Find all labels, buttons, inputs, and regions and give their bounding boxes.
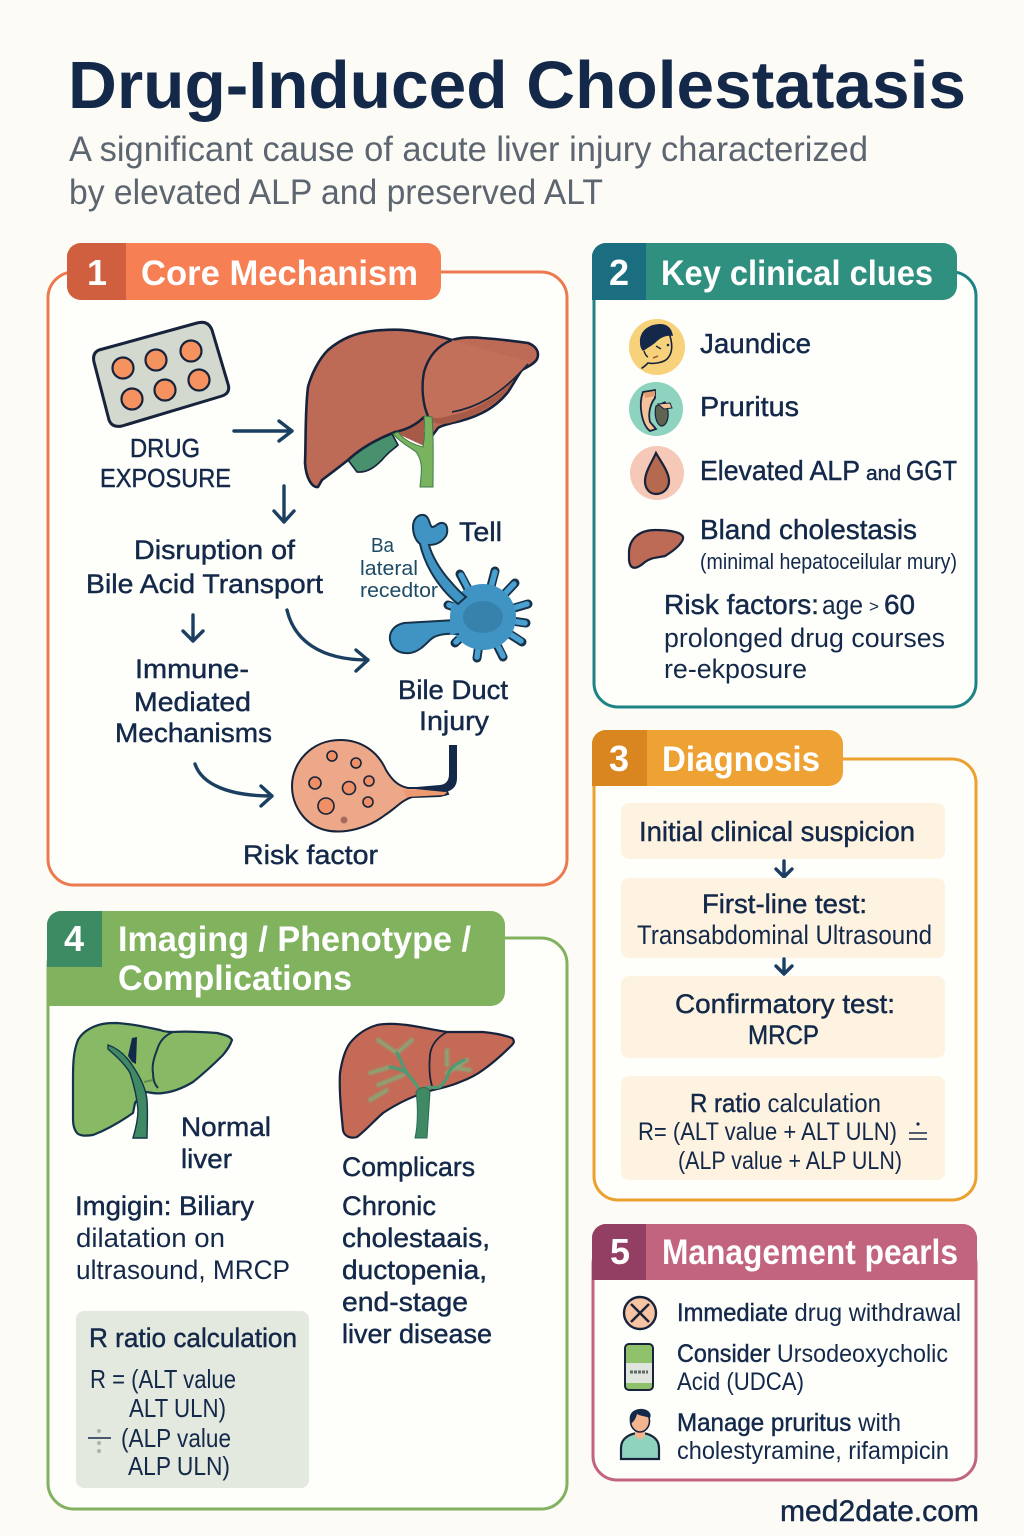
box: initial suspicion: Initial clinical suspicion — [639, 816, 915, 847]
subtitle: A significant cause of acute liver injury characterized — [69, 130, 868, 169]
text: elevated alp and ggt — [700, 455, 957, 486]
text: consider udca: Acid (UDCA) — [677, 1368, 804, 1396]
text: consider udca: Consider Ursodeoxycholic — [677, 1340, 948, 1368]
icon: liver — [305, 330, 538, 487]
panel: management pearls — [592, 1224, 977, 1480]
text: drug exposure — [100, 433, 231, 493]
text: complications list — [342, 1191, 492, 1349]
box: r ratio calculation: ALT ULN) — [129, 1393, 226, 1423]
text: disruption: Disruption of — [134, 535, 296, 565]
heading: management pearls — [592, 1224, 977, 1280]
icon: normal liver — [73, 1023, 232, 1138]
text: immune mechanisms: Mechanisms — [115, 718, 272, 748]
text: pruritus: Pruritus — [700, 391, 799, 422]
text: drug exposure: DRUG — [130, 433, 200, 463]
arrow: liver to disruption — [274, 486, 294, 522]
text: normal liver: liver — [181, 1144, 232, 1174]
heading: core mechanism: 1 — [87, 252, 107, 293]
heading: core mechanism: Core Mechanism — [141, 254, 418, 293]
text: basolateral receptor — [360, 535, 438, 602]
footer: website: med2date.com — [780, 1495, 979, 1528]
text: risk factors: age — [822, 590, 863, 620]
title: Drug-Induced Cholestatasis — [68, 48, 966, 123]
heading: management pearls: 5 — [610, 1231, 630, 1272]
text: immune mechanisms — [115, 654, 272, 748]
text: risk factors: Risk factors: — [664, 589, 819, 620]
text: elevated alp and ggt: and — [866, 463, 901, 485]
text: complications list: cholestaais, — [342, 1223, 490, 1253]
text: basolateral receptor: Ba — [371, 535, 395, 557]
heading: imaging phenotype complications: Imaging / Phenotype / — [118, 920, 471, 959]
icon: pruritus — [629, 382, 683, 436]
text: risk factors: > — [869, 597, 879, 616]
box: r ratio calculation — [76, 1311, 309, 1488]
text: bile duct injury: Bile Duct — [398, 675, 509, 705]
subtitle: by elevated ALP and preserved ALT — [69, 173, 603, 212]
text: bland cholestasis — [700, 514, 957, 574]
box: first-line test — [621, 878, 945, 958]
icon: medicine bottle — [625, 1344, 653, 1390]
arrow: drug to liver — [234, 421, 292, 441]
heading: management pearls: Management pearls — [662, 1233, 958, 1272]
icon: person — [621, 1409, 659, 1459]
text: risk factors: re-ekposure — [664, 654, 807, 684]
text: immune mechanisms: Immune- — [135, 654, 249, 684]
heading: diagnosis: 3 — [609, 738, 629, 779]
box: r ratio: R ratio calculation — [690, 1088, 881, 1118]
text: jaundice: Jaundice — [700, 328, 811, 359]
box: r ratio: R= (ALT value + ALT ULN) — [638, 1118, 897, 1146]
text: complications label: Complicars — [342, 1152, 475, 1182]
arrow: to confirmatory test — [776, 959, 792, 974]
text: disruption — [86, 535, 324, 599]
text: imaging findings: Imgigin: Biliary — [75, 1191, 254, 1221]
panel: diagnosis — [592, 730, 976, 1200]
text: manage pruritus — [677, 1409, 949, 1465]
arrow: disruption to immune — [183, 615, 203, 641]
arrow: immune to risk — [195, 764, 272, 806]
text: elevated alp and ggt: Elevated ALP — [700, 455, 860, 486]
text: risk factors — [664, 589, 945, 684]
arrow: to first-line test — [776, 861, 792, 877]
text: basolateral receptor: recedtor — [360, 580, 438, 602]
text: consider udca — [677, 1340, 948, 1396]
box: initial suspicion — [621, 803, 945, 859]
text: complications list: ductopenia, — [342, 1255, 487, 1285]
heading: imaging phenotype complications — [47, 911, 505, 1006]
text: imaging findings: dilatation on — [76, 1223, 225, 1253]
text: disruption: Bile Acid Transport — [86, 569, 324, 599]
box: first-line test: Transabdominal Ultrasound — [637, 920, 932, 950]
text: normal liver — [181, 1112, 271, 1174]
icon: blister pack — [94, 322, 229, 426]
icon: damaged hepatocyte — [292, 740, 457, 832]
icon: jaundice face — [629, 319, 685, 375]
arrow: disruption to bile duct — [287, 610, 368, 671]
box: r ratio calculation: R = (ALT value — [90, 1364, 236, 1394]
text: bile duct injury: Injury — [419, 706, 490, 736]
icon: drop — [630, 446, 684, 500]
text: imaging findings — [75, 1191, 290, 1285]
box: r ratio — [621, 1076, 945, 1180]
text: complications list: Chronic — [342, 1191, 436, 1221]
box: confirmatory test: MRCP — [748, 1020, 819, 1050]
text: imaging findings: ultrasound, MRCP — [76, 1255, 290, 1285]
heading: key clinical clues: Key clinical clues — [661, 254, 933, 293]
text: complications list: end-stage — [342, 1287, 468, 1317]
text: basolateral receptor: lateral — [360, 558, 418, 580]
text: risk factors: prolonged drug courses — [664, 623, 945, 653]
text: drug exposure: EXPOSURE — [100, 463, 231, 493]
text: immune mechanisms: Mediated — [134, 687, 251, 717]
panel: key clinical clues — [592, 243, 976, 707]
text: tell: Tell — [459, 517, 502, 547]
text: risk factor: Risk factor — [243, 840, 378, 870]
box: r ratio: (ALP value + ALP ULN) — [678, 1147, 902, 1175]
text: risk factors: 60 — [884, 589, 915, 620]
box: confirmatory test — [621, 976, 945, 1058]
box: r ratio calculation: (ALP value — [121, 1423, 231, 1453]
subtitle — [69, 130, 868, 212]
text: immediate withdrawal: Immediate drug withdrawal — [677, 1299, 961, 1327]
text: normal liver: Normal — [181, 1112, 271, 1142]
text: bland cholestasis: Bland cholestasis — [700, 514, 917, 545]
heading: imaging phenotype complications: Complications — [118, 959, 352, 998]
heading: diagnosis: Diagnosis — [662, 740, 820, 779]
heading: key clinical clues — [592, 243, 957, 300]
icon: small liver — [629, 530, 683, 568]
text: manage pruritus: cholestyramine, rifampicin — [677, 1437, 949, 1465]
text: elevated alp and ggt: GGT — [906, 455, 957, 486]
box: r ratio calculation: ALP ULN) — [128, 1451, 230, 1481]
panel: core mechanism — [48, 243, 567, 885]
text: bile duct injury — [398, 675, 509, 736]
heading: imaging phenotype complications: 4 — [64, 918, 84, 959]
icon: bile duct cell — [390, 515, 528, 658]
box: first-line test: First-line test: — [702, 889, 867, 919]
icon: stop — [624, 1297, 656, 1329]
heading: key clinical clues: 2 — [609, 252, 629, 293]
text: complications list: liver disease — [342, 1319, 492, 1349]
text: bland cholestasis: (minimal hepatoceilular mury) — [700, 549, 957, 574]
box: confirmatory test: Confirmatory test: — [675, 989, 895, 1019]
heading: diagnosis — [592, 730, 843, 786]
box: r ratio calculation: R ratio calculation — [89, 1323, 297, 1353]
icon: damaged liver — [340, 1024, 514, 1138]
text: manage pruritus: Manage pruritus with — [677, 1409, 901, 1437]
panel: imaging phenotype complications — [47, 911, 567, 1509]
heading: core mechanism — [67, 243, 441, 300]
